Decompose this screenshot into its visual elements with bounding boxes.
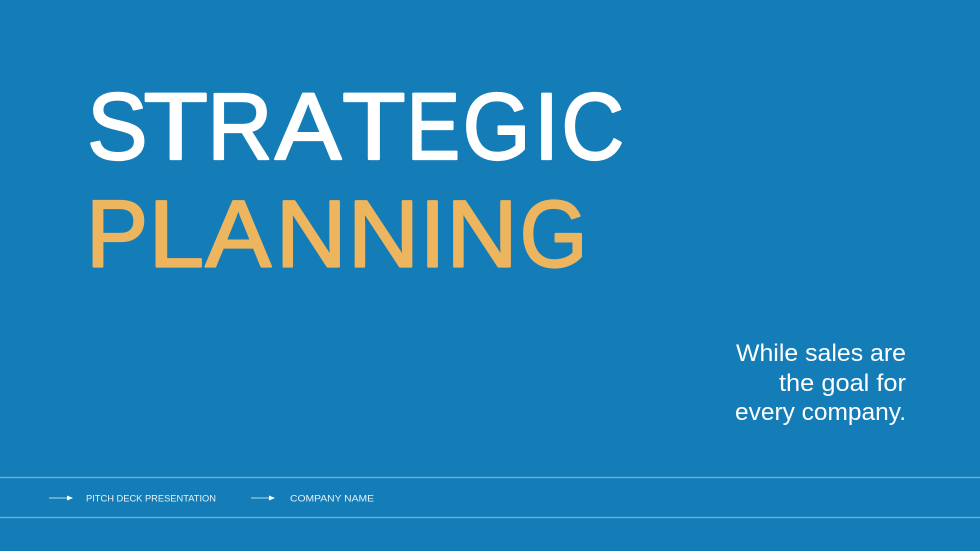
title line: PLANNING: A [205,182,272,288]
title line: STRATEGIC: C [561,74,624,180]
title line: STRATEGIC: R [207,74,272,180]
title line: STRATEGIC: I [534,74,559,180]
icon: arrow before company name label [251,496,275,500]
footer label: pitch deck presentation: PITCH DECK PRESENTATION [86,494,216,504]
title line: PLANNING: N [276,182,347,288]
title line: PLANNING: G [520,182,588,288]
title line: STRATEGIC: T [144,74,208,180]
title line: STRATEGIC: E [407,74,460,180]
title: strategic planning [86,74,624,288]
icon: arrow before pitch deck label [49,496,73,500]
title line: STRATEGIC: S [87,74,148,180]
title line: PLANNING: N [348,182,419,288]
tagline text block: While sales are [736,340,906,367]
title line: PLANNING: I [420,182,445,288]
title line: PLANNING: N [446,182,518,288]
title line: STRATEGIC: T [342,74,406,180]
title line: STRATEGIC: A [275,74,342,180]
footer band [0,478,980,518]
tagline text block: every company. [735,399,906,426]
title line: PLANNING: L [148,182,204,288]
title line: PLANNING: P [86,182,148,288]
tagline text block [735,340,906,426]
footer label: company name: COMPANY NAME [290,494,374,504]
tagline text block: the goal for [779,370,906,397]
title line: STRATEGIC: G [463,74,530,180]
